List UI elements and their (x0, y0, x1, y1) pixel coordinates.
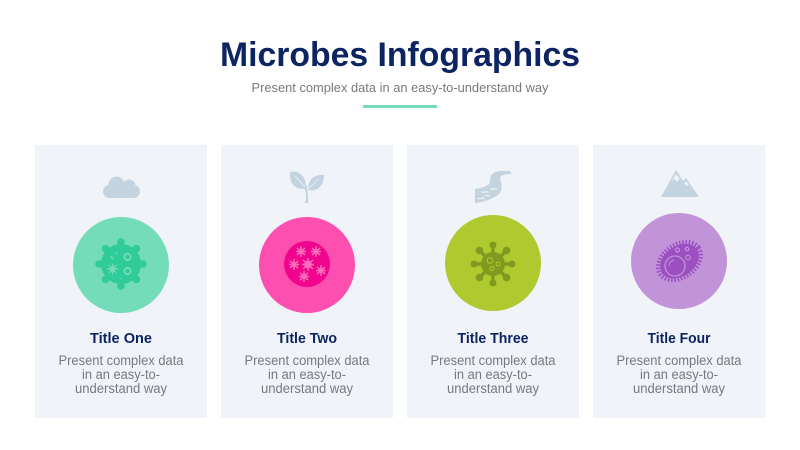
text block: title one: understand way (75, 381, 167, 396)
heading: title four: Title Four (648, 330, 711, 347)
circle with microbe one (73, 217, 169, 313)
text block: title four: Present complex data (616, 353, 742, 368)
circle with microbe three (445, 215, 541, 311)
text block: title two: understand way (261, 381, 353, 396)
icon: river (475, 171, 511, 203)
icon: sprout (290, 172, 324, 203)
text block: title two: in an easy-to- (268, 367, 346, 382)
text block: title three: Present complex data (430, 353, 556, 368)
icon: hairy bacterium (651, 235, 708, 287)
text block: title three (430, 353, 556, 396)
text block: title two (244, 353, 370, 396)
icon: spiky microbe (95, 238, 147, 290)
text block: title three: understand way (447, 381, 539, 396)
icon: star cells (289, 246, 326, 282)
panel: title one (35, 145, 207, 418)
text block: title four: understand way (633, 381, 725, 396)
text block: title one: in an easy-to- (82, 367, 160, 382)
text block: title four (616, 353, 742, 396)
heading: title two: Title Two (277, 330, 337, 347)
circle with microbe two (259, 217, 355, 313)
heading: title three: Title Three (458, 330, 528, 347)
subtitle: Present complex data in an easy-to-understand way (252, 80, 549, 95)
panel: title three (407, 145, 579, 418)
text block: title three: in an easy-to- (454, 367, 532, 382)
icon: mountain (661, 170, 699, 197)
icon: cloud (103, 176, 140, 198)
text block: title one (58, 353, 184, 396)
text block: title one: Present complex data (58, 353, 184, 368)
panel: title four (593, 145, 765, 418)
text block: title two: Present complex data (244, 353, 370, 368)
icon: virus with arms (470, 242, 516, 286)
text block: title four: in an easy-to- (640, 367, 718, 382)
panel: title two (221, 145, 393, 418)
accent underline (363, 105, 437, 108)
circle with microbe four (631, 213, 727, 309)
heading: title one: Title One (90, 330, 152, 347)
title: Microbes Infographics (220, 36, 580, 74)
